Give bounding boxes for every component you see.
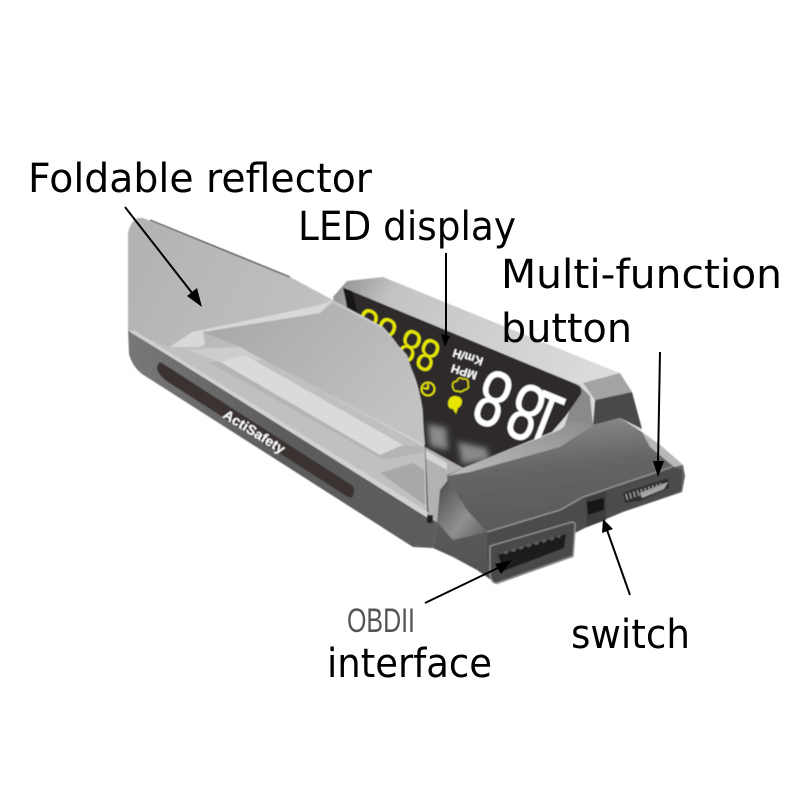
label: switch: switch xyxy=(571,612,690,658)
label: interface: interface xyxy=(327,641,492,687)
right wing body xyxy=(433,418,685,584)
label: multi-function button: button xyxy=(501,306,632,352)
device: head-up display unit xyxy=(128,218,685,584)
left base xyxy=(128,330,437,548)
icon: clock xyxy=(422,382,434,396)
multi-function button xyxy=(623,478,669,503)
time readout: 88'88 xyxy=(347,297,447,384)
label: OBDII: OBDII xyxy=(347,602,415,640)
label: LED display: LED display xyxy=(298,204,516,250)
foldable reflector panel xyxy=(128,218,433,523)
tray behind reflector xyxy=(425,447,463,526)
logo strip xyxy=(157,363,354,498)
arrow: foldable reflector xyxy=(125,207,202,307)
switch xyxy=(586,492,606,527)
label: foldable reflector: Foldable reflector xyxy=(28,156,373,202)
label: multi-function button: Multi-function xyxy=(501,252,782,298)
LED screen xyxy=(343,288,581,469)
arrow: LED display xyxy=(441,253,450,347)
brand logo: ActiSafety xyxy=(220,407,288,457)
icon: cloud xyxy=(452,378,468,392)
icon: bell xyxy=(448,396,462,414)
unit label: mph: MPH xyxy=(449,361,479,382)
speed readout: 188 xyxy=(462,351,576,469)
OBDII port xyxy=(490,522,575,583)
unit label: km/h: Km/H xyxy=(451,346,485,368)
arrow: OBDII interface xyxy=(425,560,512,603)
reflection: tray seen through glass xyxy=(203,303,425,445)
display housing xyxy=(333,277,642,470)
arrow: switch xyxy=(602,519,630,595)
arrow: multi-function button xyxy=(653,352,664,477)
